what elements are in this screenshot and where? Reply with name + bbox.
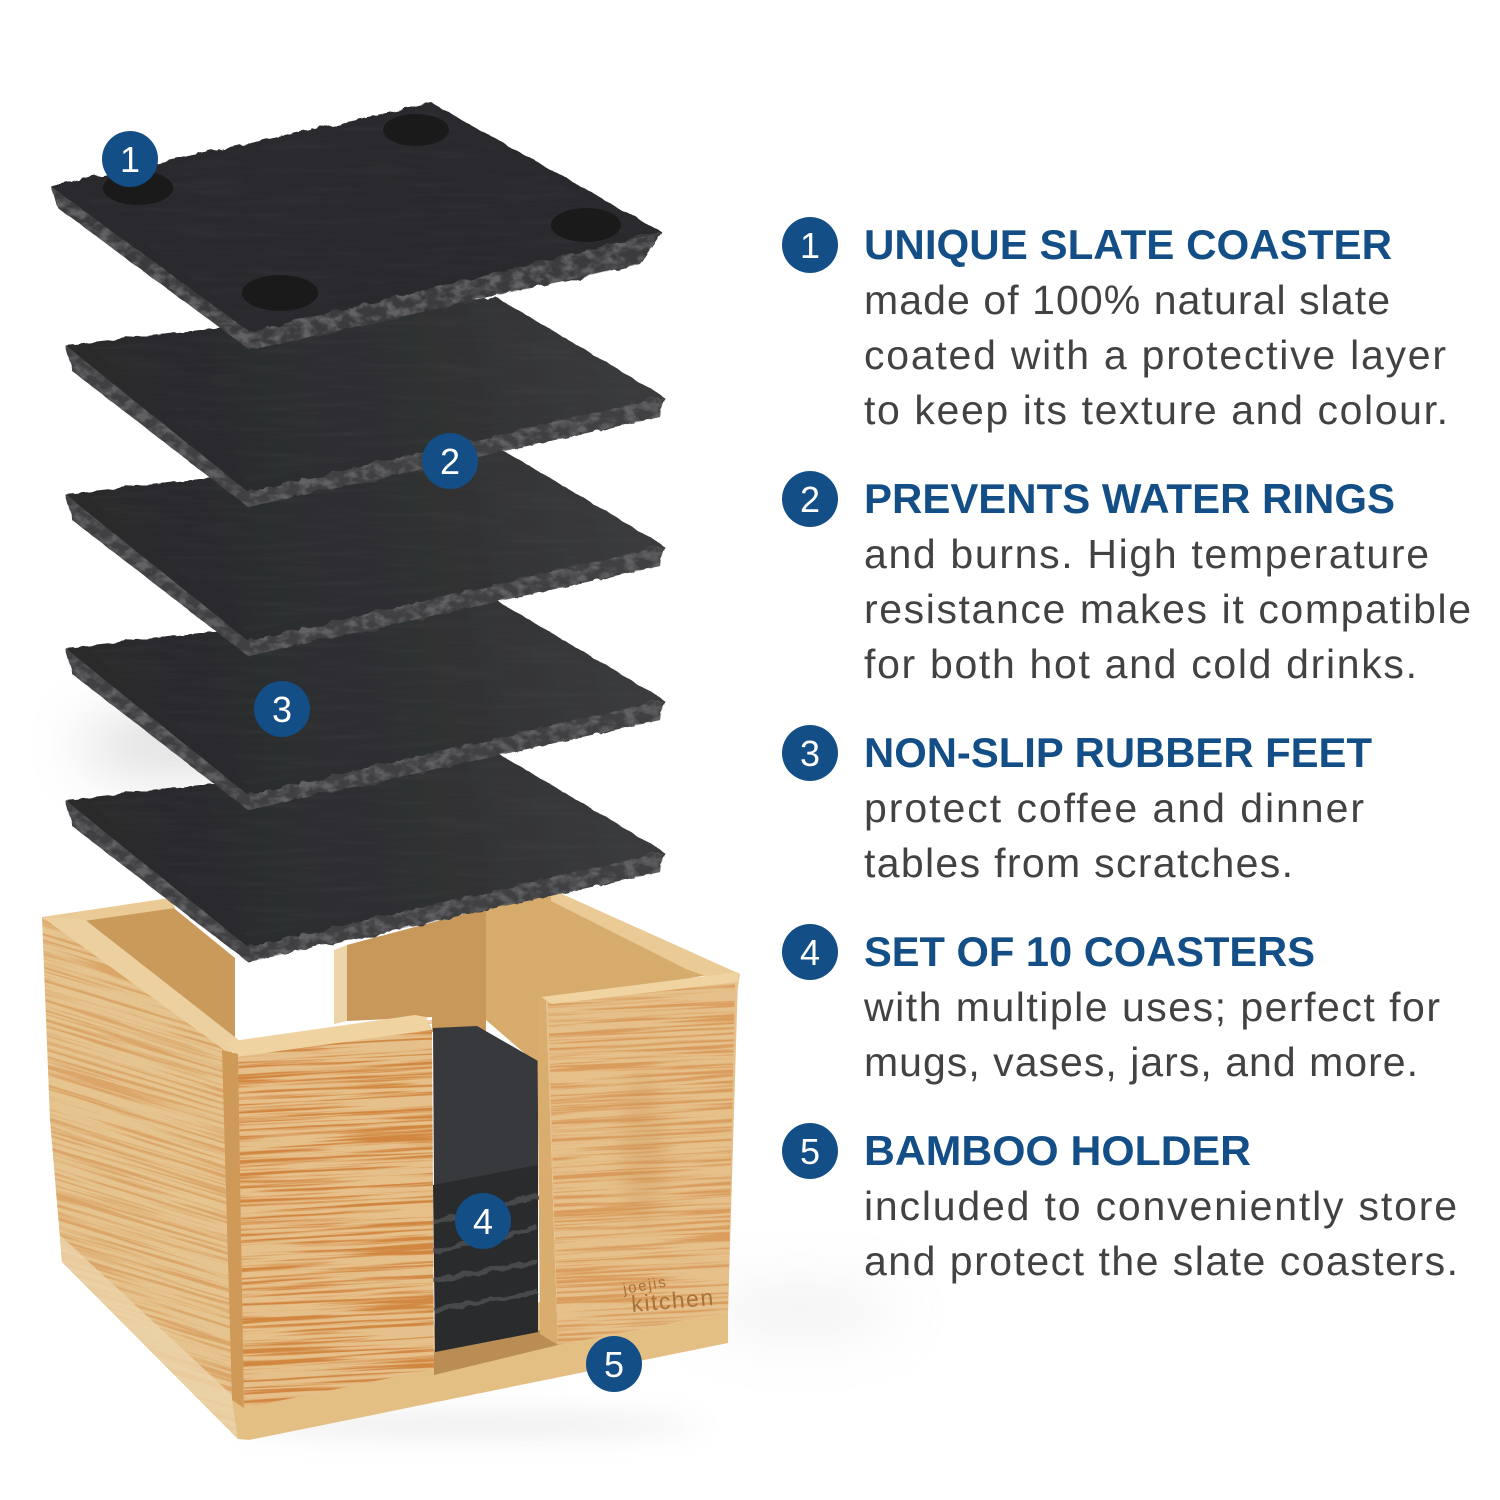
- image marker 5: [586, 1336, 642, 1392]
- number badge 4: [782, 924, 838, 980]
- description 5: and protect the slate coasters.: [864, 1238, 1458, 1284]
- description 1: [864, 277, 1448, 433]
- holder right panel: [546, 978, 738, 1345]
- description 2: and burns. High temperature: [864, 531, 1429, 577]
- top slate coaster with rubber feet: [50, 103, 662, 350]
- image marker 4: 4: [473, 1201, 493, 1242]
- holder rear left rim: [42, 898, 175, 921]
- holder back wall edge: [334, 945, 347, 1024]
- holder inner right wall: [486, 893, 708, 1064]
- feature 1: [782, 217, 1448, 433]
- rubber foot 1: [103, 171, 173, 205]
- brand mark: [621, 1274, 714, 1317]
- number badge 5: 5: [800, 1131, 820, 1172]
- description 2: for both hot and cold drinks.: [864, 641, 1417, 687]
- slate coaster 2: [65, 297, 664, 507]
- description 5: included to conveniently store: [864, 1183, 1457, 1229]
- description 3: tables from scratches.: [864, 840, 1293, 886]
- feature 5: [782, 1123, 1458, 1284]
- description 3: protect coffee and dinner: [864, 785, 1364, 831]
- number badge 5: [782, 1123, 838, 1179]
- holder front left top edge: [226, 1015, 431, 1057]
- holder right panel side: [537, 997, 558, 1345]
- number badge 1: [782, 217, 838, 273]
- image marker 3: [254, 681, 310, 737]
- number badge 2: [782, 471, 838, 527]
- holder corner strip: [222, 1050, 244, 1408]
- feature 2: [782, 471, 1471, 687]
- image marker 2: 2: [440, 441, 460, 482]
- number badge 3: [782, 725, 838, 781]
- image marker 5: 5: [604, 1344, 624, 1385]
- left face grain: [42, 919, 238, 1438]
- description 1: made of 100% natural slate: [864, 277, 1390, 323]
- description 2: resistance makes it compatible: [864, 586, 1471, 632]
- holder rear right rim: [551, 889, 740, 988]
- number badge 1: 1: [800, 225, 820, 266]
- feature 3: [782, 725, 1372, 886]
- holder left rim: [42, 917, 240, 1054]
- heading 2: PREVENTS WATER RINGS: [864, 475, 1395, 522]
- image marker 1: [102, 131, 158, 187]
- description 2: [864, 531, 1471, 687]
- slot floor: [434, 1330, 558, 1375]
- description 5: [864, 1183, 1458, 1284]
- holder front left panel: [235, 1016, 434, 1408]
- brand mark: joejis: [621, 1274, 667, 1298]
- coasters inside the slot: [433, 1026, 538, 1352]
- number badge 2: 2: [800, 479, 820, 520]
- soft shadows: [80, 723, 900, 1435]
- holder base: [232, 1302, 728, 1440]
- description 1: coated with a protective layer: [864, 332, 1446, 378]
- rubber foot 4: [242, 275, 318, 311]
- image marker 2: [422, 433, 478, 489]
- heading 4: SET OF 10 COASTERS: [864, 928, 1315, 975]
- holder left face lower pale band: [60, 1235, 238, 1439]
- holder left face: [42, 917, 238, 1439]
- holder inner left wall: [84, 905, 235, 1046]
- bamboo holder: [42, 892, 740, 1440]
- description 1: to keep its texture and colour.: [864, 387, 1448, 433]
- image marker 1: 1: [120, 139, 140, 180]
- bamboo node: [620, 1070, 664, 1230]
- heading 1: UNIQUE SLATE COASTER: [864, 221, 1392, 268]
- description 3: [864, 785, 1364, 886]
- holder right panel top edge: [541, 972, 738, 1004]
- number badge 3: 3: [800, 733, 820, 774]
- slate coaster 4: [65, 600, 664, 810]
- wood grain front: [238, 1020, 434, 1408]
- image marker 4: [455, 1193, 511, 1249]
- heading 3: NON-SLIP RUBBER FEET: [864, 729, 1372, 776]
- holder back wall: [347, 908, 486, 1032]
- slate coaster 3: [65, 446, 664, 656]
- heading 5: BAMBOO HOLDER: [864, 1127, 1251, 1174]
- number badge 4: 4: [800, 932, 820, 973]
- brand mark: kitchen: [630, 1284, 714, 1317]
- wood grain right: [548, 984, 735, 1345]
- description 4: with multiple uses; perfect for: [863, 984, 1440, 1030]
- description 4: [863, 984, 1440, 1085]
- feature 4: [782, 924, 1440, 1085]
- rubber foot 3: [551, 208, 621, 242]
- image marker 3: 3: [272, 689, 292, 730]
- rubber foot 2: [383, 114, 449, 146]
- slate coaster 5: [65, 752, 664, 962]
- description 4: mugs, vases, jars, and more.: [864, 1039, 1418, 1085]
